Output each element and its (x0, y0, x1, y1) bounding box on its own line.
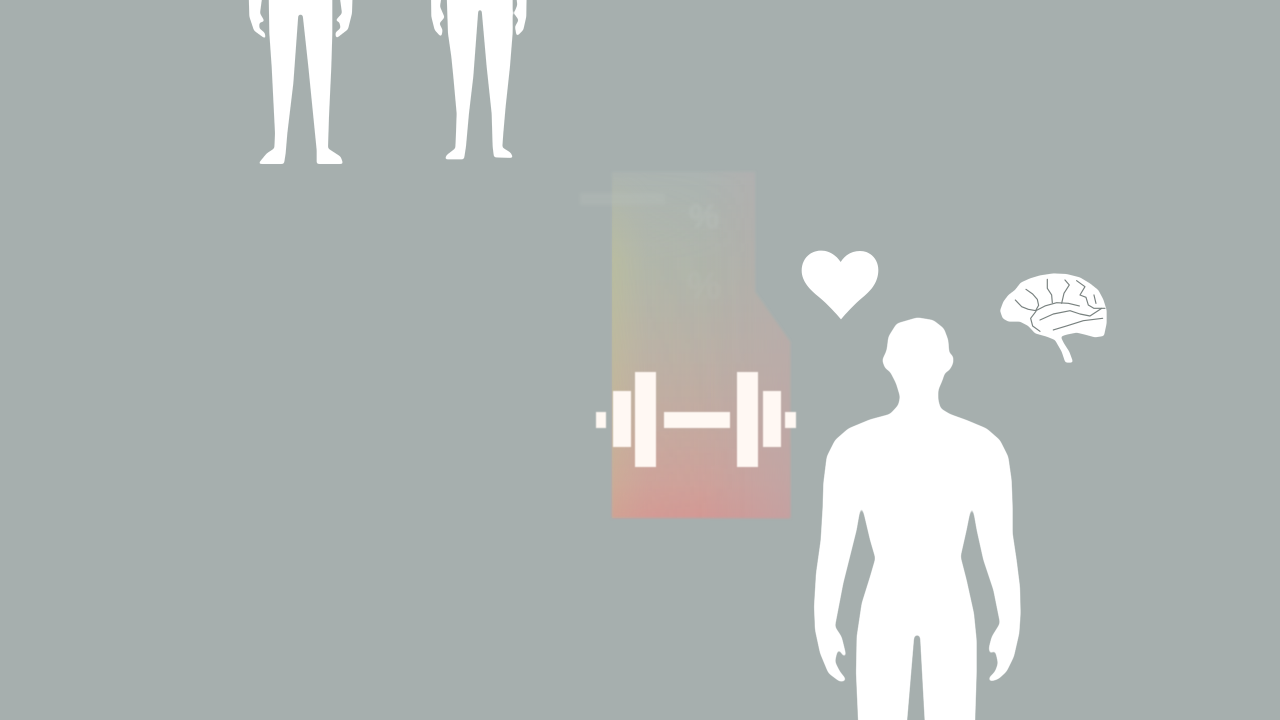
figure: small person right (legs) (431, 0, 527, 159)
faded percent top: % (689, 198, 719, 236)
faded label bar (580, 193, 665, 205)
icon: dumbbell (596, 372, 796, 467)
infographic scene (248, 0, 1107, 720)
icon: heart (802, 251, 878, 319)
icon: brain (1000, 273, 1107, 363)
figure: small person left (legs) (249, 0, 353, 164)
faded percent lower: % (687, 265, 721, 307)
figure: large person (814, 317, 1021, 720)
panel: gradient chart card (611, 173, 792, 519)
